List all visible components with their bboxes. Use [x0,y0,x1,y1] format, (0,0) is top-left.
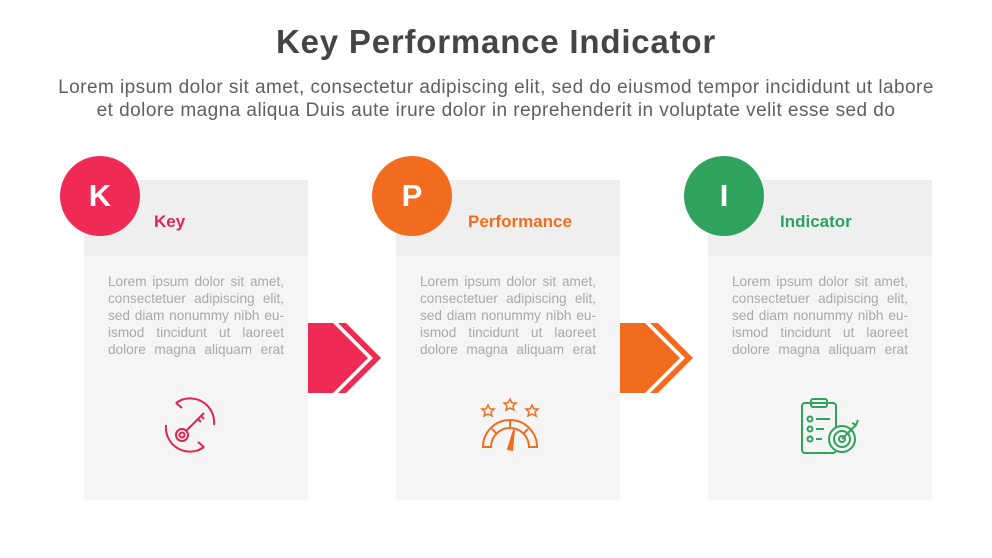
icon: clipboard target [801,398,859,454]
circle K [60,156,140,236]
arrow 2 [620,323,693,393]
subtitle: Lorem ipsum dolor sit amet, consectetur adipiscing elit, sed do eiusmod tempor incididunt ut labore [58,77,934,98]
heading performance: Performance [468,212,572,231]
panel: key [84,180,308,500]
panel: indicator [708,180,932,500]
subtitle [58,77,934,121]
circle P [372,156,452,236]
circle I: I [720,178,728,213]
heading key: Key [154,212,185,231]
circle K: K [89,178,111,213]
text performance: Lorem ipsum dolor sit amet, consectetuer adipiscing elit, sed diam nonummy nibh eu- ismod tincidunt ut laoreet dolore magna aliquam erat [420,274,596,357]
title: Key Performance Indicator [276,23,716,60]
icon: speedometer [480,398,540,452]
arrow 1 [308,323,381,393]
text key: Lorem ipsum dolor sit amet, consectetuer adipiscing elit, sed diam nonummy nibh eu- ismod tincidunt ut laoreet dolore magna aliquam erat [108,274,284,357]
subtitle: et dolore magna aliqua Duis aute irure dolor in reprehenderit in voluptate velit esse sed do [97,100,895,121]
icon: key [164,397,216,453]
circle P: P [402,178,422,213]
circle I [684,156,764,236]
text indicator: Lorem ipsum dolor sit amet, consectetuer adipiscing elit, sed diam nonummy nibh eu- ismod tincidunt ut laoreet dolore magna aliquam erat [732,274,908,357]
heading indicator: Indicator [780,212,852,231]
panel: performance [396,180,620,500]
